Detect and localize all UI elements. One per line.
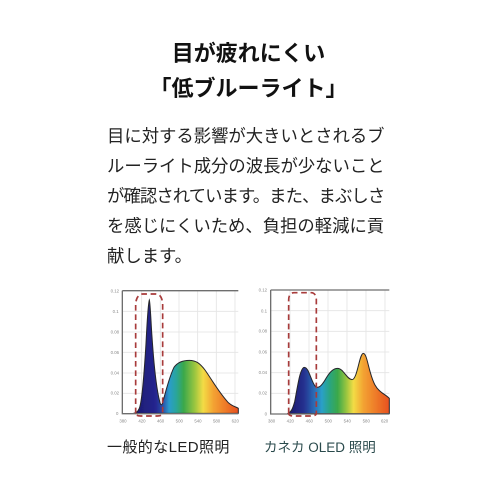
body text: 献します。 — [107, 246, 192, 266]
y axis labels: 0.04 — [111, 371, 120, 376]
y axis labels: 0 — [116, 411, 119, 416]
grid lines — [122, 291, 238, 413]
x axis labels: 380 — [119, 419, 127, 424]
x axis labels: 620 — [232, 419, 239, 424]
body text: が確認されています。また、まぶしさ — [107, 186, 384, 206]
y axis labels — [111, 288, 120, 416]
y axis labels — [259, 288, 268, 416]
y axis labels: 0.12 — [111, 288, 120, 293]
x axis labels: 620 — [381, 419, 389, 424]
body text: 目に対する影響が大きいとされるブ — [107, 126, 385, 146]
y axis labels: 0.08 — [111, 329, 120, 334]
x axis labels: 580 — [213, 419, 221, 424]
x axis labels: 380 — [268, 419, 276, 424]
y axis labels: 0.06 — [111, 350, 120, 355]
body text: ルーライト成分の波長が少ないこと — [107, 156, 385, 176]
y axis labels: 0.06 — [259, 349, 268, 354]
axes — [271, 290, 389, 414]
spectrum area — [133, 300, 238, 413]
body text — [107, 126, 385, 266]
caption: Kaneka OLED: カネカ OLED 照明 — [264, 440, 376, 455]
y axis labels: 0.1 — [113, 309, 119, 314]
x axis labels: 580 — [363, 419, 370, 424]
x axis labels: 540 — [344, 419, 351, 424]
y axis labels: 0 — [265, 411, 268, 416]
title line 2: 「低ブルーライト」 — [149, 76, 348, 101]
x axis labels: 540 — [194, 419, 202, 424]
y axis labels: 0.12 — [259, 288, 268, 293]
x axis labels: 500 — [176, 419, 183, 424]
body text: を感じにくいため、負担の軽減に貢 — [107, 216, 384, 236]
highlight box — [136, 294, 163, 416]
y axis labels: 0.08 — [259, 329, 268, 334]
x axis labels: 460 — [157, 419, 165, 424]
x axis labels: 420 — [138, 419, 146, 424]
x axis labels: 420 — [287, 419, 294, 424]
title — [149, 41, 348, 101]
y axis labels: 0.04 — [259, 370, 268, 375]
x axis labels: 460 — [306, 419, 313, 424]
caption: general LED: 一般的なLED照明 — [107, 439, 230, 456]
x axis labels: 500 — [325, 419, 332, 424]
x axis labels — [119, 419, 239, 424]
highlight box — [289, 293, 316, 416]
y axis labels: 0.1 — [261, 308, 268, 313]
x axis labels — [268, 419, 389, 424]
chart: Kaneka OLED spectrum — [259, 288, 389, 424]
axes — [122, 291, 238, 414]
y axis labels: 0.02 — [259, 391, 268, 396]
spectrum area — [287, 353, 389, 414]
y axis labels: 0.02 — [111, 391, 120, 396]
title line 1: 目が疲れにくい — [172, 41, 325, 66]
chart: general LED spectrum — [111, 288, 239, 424]
grid lines — [271, 290, 389, 413]
